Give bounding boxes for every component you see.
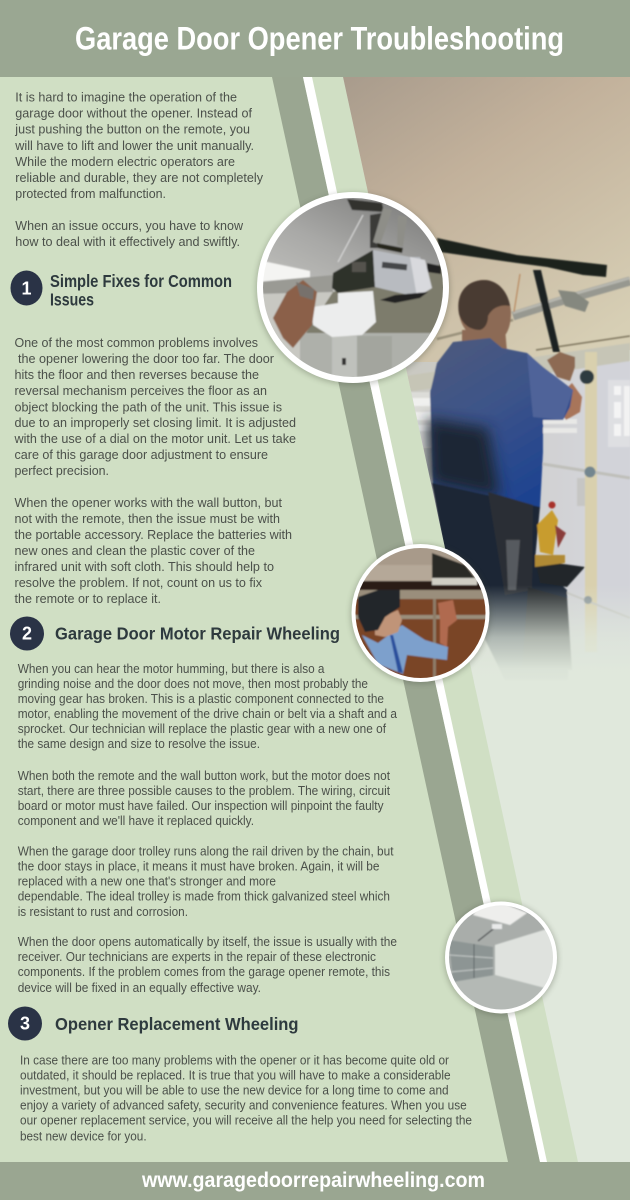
circle photo: opener unit and hand — [255, 190, 455, 390]
intro text block: will have to lift and lower the unit manually. — [14, 138, 254, 153]
section 2 paragraph 4: components. If the problem comes from the garage opener remote, this — [18, 964, 390, 979]
section 3 paragraph: enjoy a variety of advanced safety, security and convenience features. When you use — [20, 1098, 467, 1112]
section 2 paragraph 3 — [18, 844, 394, 919]
section 3 paragraph: investment, but you will be able to use the new device for a long time to come and — [20, 1082, 449, 1098]
section 1 paragraph 1: the opener lowering the door too far. The door — [18, 351, 275, 366]
section 1 paragraph 1: perfect precision. — [14, 463, 109, 478]
intro text block: It is hard to imagine the operation of the — [15, 90, 237, 104]
section 2 paragraph 4: receiver. Our technicians are experts in the repair of these electronic — [18, 949, 376, 964]
section 2 paragraph 3: dependable. The ideal trolley is made from thick galvanized steel which — [18, 888, 390, 904]
circle photo: empty garage interior — [444, 900, 560, 1016]
intro text block: just pushing the button on the remote, you — [14, 122, 250, 137]
section 2 paragraph 4: When the door opens automatically by itself, the issue is usually with the — [18, 934, 397, 949]
section 3 paragraph: In case there are too many problems with the opener or it has become quite old or — [20, 1052, 450, 1068]
badge number 2 — [10, 616, 44, 650]
section 2 paragraph 1 — [18, 661, 398, 751]
intro text block: protected from malfunction. — [15, 186, 166, 201]
section 2 heading — [10, 616, 340, 650]
section 1 paragraph 1: due to an improperly set closing limit. It is adjusted — [14, 415, 296, 430]
badge number 3: 3 — [20, 1014, 30, 1034]
circle photo: technician adjusting opener — [350, 540, 490, 684]
section 2 paragraph 1: grinding noise and the door does not move, then most probably the — [18, 676, 368, 691]
bottom url bar — [0, 1162, 630, 1200]
intro text block: garage door without the opener. Instead of — [15, 106, 252, 121]
heading text 2: Garage Door Motor Repair Wheeling — [55, 624, 340, 644]
heading text 1 — [50, 271, 232, 310]
intro text block — [14, 90, 263, 249]
section 3 paragraph: our opener replacement service, you will receive all the help you need for selecting the — [20, 1112, 472, 1128]
section 2 paragraph 2: component and we'll have it replaced quickly. — [18, 813, 254, 828]
section 1 heading — [10, 270, 232, 310]
section 2 paragraph 4 — [18, 934, 397, 995]
section 2 paragraph 2 — [18, 768, 390, 828]
section 1 paragraph 2: not with the remote, then the issue must be with — [14, 511, 280, 526]
section 1 paragraph 2: infrared unit with soft cloth. This should help to — [14, 559, 274, 574]
section 3 paragraph — [20, 1052, 472, 1144]
section 2 paragraph 1: When you can hear the motor humming, but there is also a — [18, 661, 325, 676]
section 1 paragraph 2: the portable accessory. Replace the batteries with — [14, 527, 292, 542]
intro text block: how to deal with it effectively and swiftly. — [15, 234, 240, 249]
section 2 paragraph 3: is resistant to rust and corrosion. — [18, 904, 188, 919]
diagonal white line — [303, 77, 547, 1162]
section 3 paragraph: best new device for you. — [20, 1128, 147, 1144]
website url: www.garagedoorrepairwheeling.com — [141, 1169, 485, 1192]
section 2 paragraph 2: When both the remote and the wall button work, but the motor does not — [18, 768, 390, 783]
section 1 paragraph 2: the remote or to replace it. — [14, 591, 161, 606]
section 2 paragraph 3: When the garage door trolley runs along the rail driven by the chain, but — [18, 844, 394, 858]
section 2 paragraph 1: moving gear has broken. This is a plastic component connected to the — [18, 691, 384, 706]
section 1 paragraph 1: reversal mechanism perceives the floor as an — [14, 383, 267, 398]
section 1 paragraph 2: resolve the problem. If not, count on us to fix — [14, 575, 262, 590]
diagonal grey band — [272, 77, 540, 1162]
section 2 paragraph 3: the door stays in place, it means it must have broken. Again, it will be — [18, 858, 379, 874]
section 1 paragraph 1: care of this garage door adjustment to ensure — [14, 447, 268, 462]
badge number 2: 2 — [22, 624, 32, 644]
badge number 3 — [8, 1006, 42, 1040]
section 2 paragraph 2: board or motor must have failed. Our inspection will pinpoint the faulty — [18, 798, 384, 813]
section 1 paragraph 1: hits the floor and then reverses because the — [14, 367, 259, 382]
section 2 paragraph 1: the same design and size to resolve the issue. — [18, 736, 260, 751]
section 1 paragraph 1: object blocking the path of the unit. This issue is — [14, 400, 282, 414]
section 2 paragraph 3: replaced with a new one that's stronger and more — [18, 874, 276, 888]
section 1 paragraph 1 — [14, 335, 296, 478]
badge number 1: 1 — [21, 278, 32, 298]
top title bar — [0, 0, 630, 77]
section 1 paragraph 2: new ones and clean the plastic cover of the — [14, 543, 255, 558]
heading text 1: Simple Fixes for Common — [50, 271, 232, 291]
section 1 paragraph 2 — [14, 495, 292, 606]
section 3 paragraph: outdated, it should be replaced. It is true that you will have to make a considerable — [20, 1068, 451, 1082]
section 3 heading — [8, 1006, 298, 1040]
section 1 paragraph 1: One of the most common problems involves — [14, 335, 258, 350]
section 2 paragraph 1: motor, enabling the movement of the drive chain or belt via a shaft and a — [18, 706, 398, 721]
section 1 paragraph 2: When the opener works with the wall button, but — [14, 495, 282, 510]
photo: technician at garage door — [340, 77, 630, 1167]
badge number 1 — [10, 270, 42, 306]
section 1 paragraph 1: with the use of a dial on the motor unit. Let us take — [14, 431, 296, 446]
section 2 paragraph 4: device will be fixed in an equally effective way. — [18, 980, 261, 995]
intro text block: reliable and durable, they are not completely — [15, 170, 263, 185]
section 2 paragraph 1: sprocket. Our technician will replace the plastic gear with a new one of — [18, 721, 386, 736]
intro text block: While the modern electric operators are — [15, 154, 235, 169]
heading text 3: Opener Replacement Wheeling — [55, 1014, 298, 1034]
heading text 1: Issues — [50, 290, 94, 310]
intro text block: When an issue occurs, you have to know — [15, 218, 244, 233]
section 2 paragraph 2: start, there are three possible causes to the problem. The wiring, circuit — [18, 783, 390, 798]
